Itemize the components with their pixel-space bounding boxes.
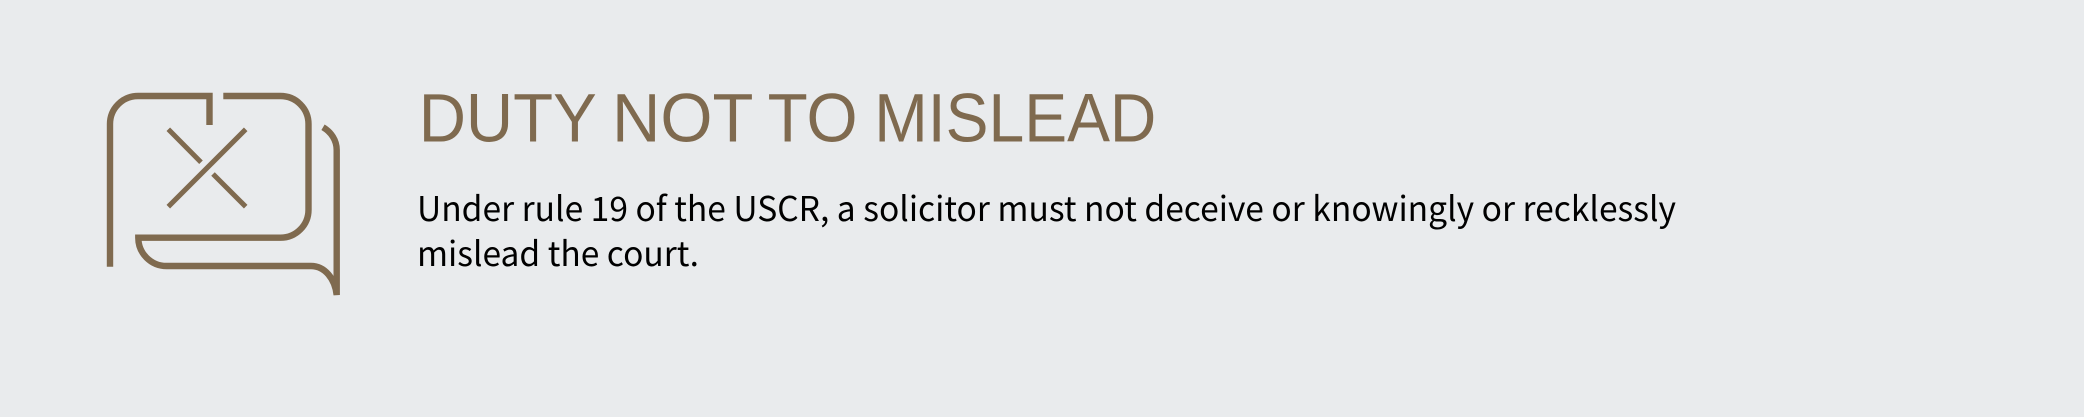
heading word 1: DUTY — [419, 80, 597, 156]
cross mark — [168, 129, 246, 207]
icon: speech bubbles with cross — [110, 96, 337, 295]
heading word 4: MISLEAD — [874, 80, 1156, 156]
body line 1: Under rule 19 of the USCR, a solicitor must not deceive or knowingly or recklessly — [417, 182, 1676, 231]
body line 2: mislead the court. — [417, 227, 699, 276]
front bubble left outline — [110, 96, 210, 267]
heading — [419, 80, 1156, 156]
heading word 3: TO — [768, 80, 858, 156]
front and back bubble outline — [138, 96, 337, 295]
heading word 2: NOT — [612, 80, 753, 156]
body text — [417, 182, 1676, 276]
